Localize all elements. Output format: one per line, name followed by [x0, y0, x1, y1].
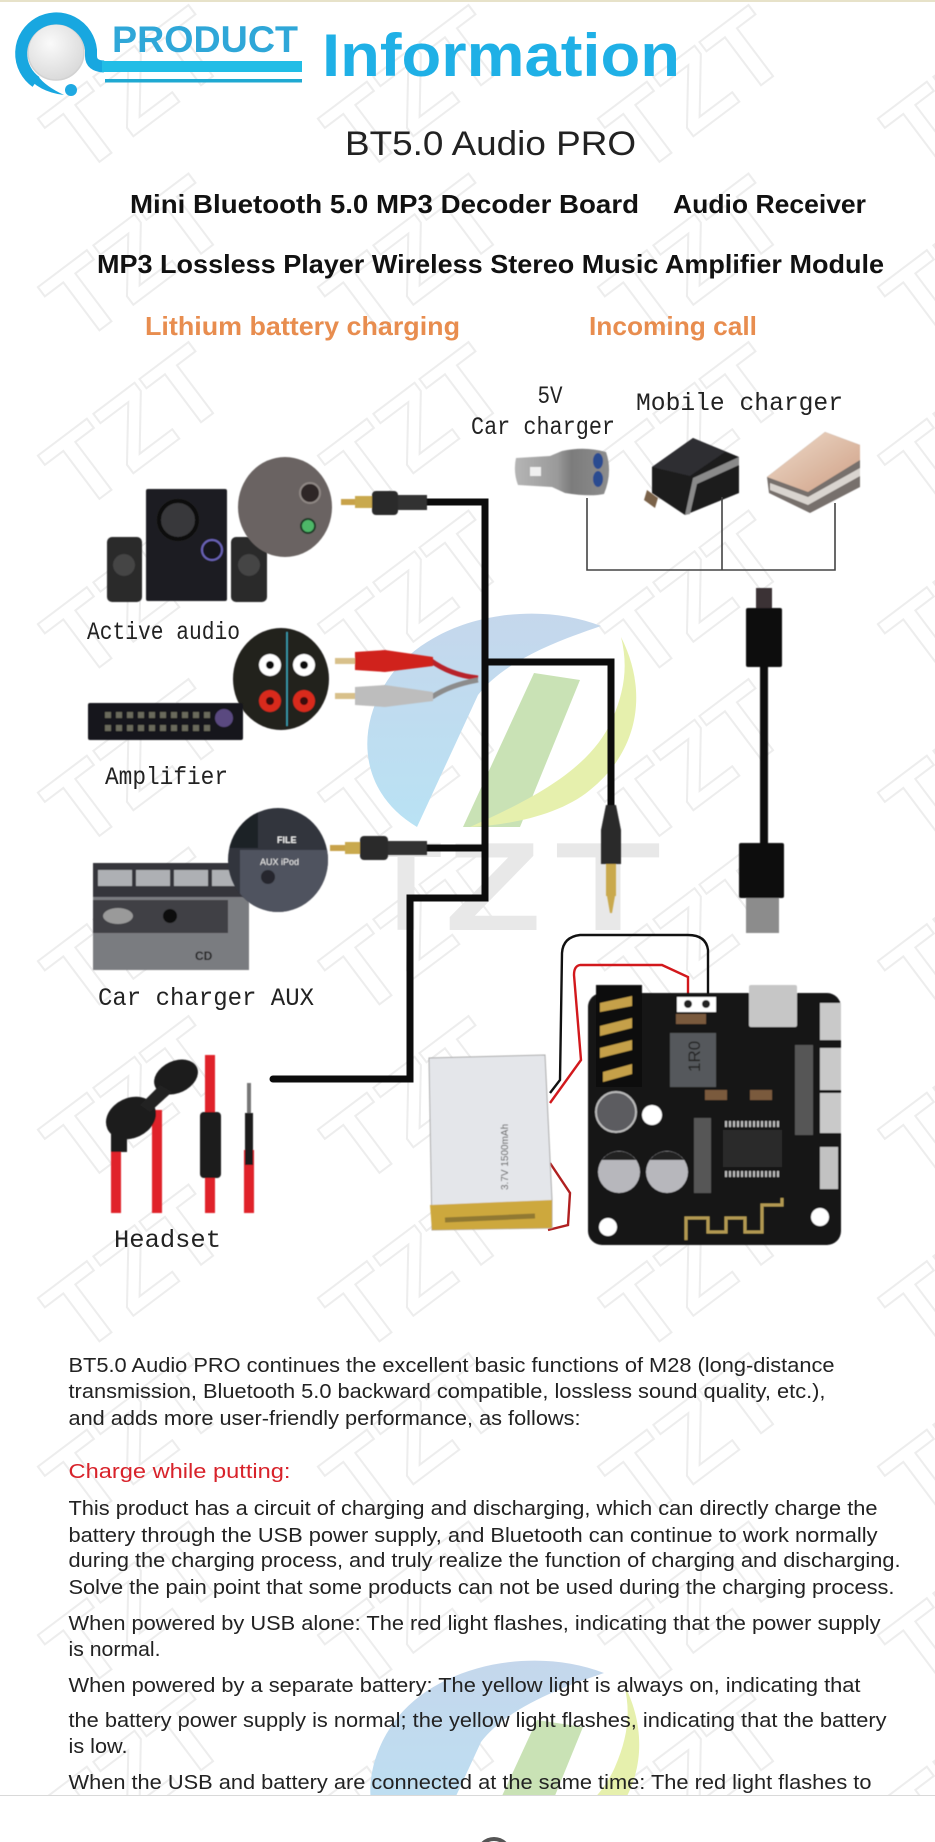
TZT watermark: Z [445, 816, 541, 957]
chip [723, 1130, 782, 1167]
label: amplifier: Amplifier [105, 763, 228, 792]
description paragraph: during the charging process, and truly realize the function of charging and discharging. [68, 1550, 900, 1572]
logo watermark [367, 614, 636, 827]
pads [677, 997, 716, 1012]
icon: car charger [515, 449, 609, 495]
audio jack [596, 985, 642, 1087]
icon: wall charger [644, 438, 739, 515]
description paragraph [68, 1498, 900, 1599]
battery power note: the battery power supply is normal; the yellow light flashes, indicating that the battery [68, 1710, 886, 1732]
connection diagram [87, 382, 860, 1255]
icon: car stereo [93, 863, 249, 970]
top strip [0, 0, 935, 2]
PRODUCT label: PRODUCT [112, 19, 298, 60]
icon: lithium battery [429, 1055, 552, 1230]
intro paragraph: transmission, Bluetooth 5.0 backward compatible, lossless sound quality, etc.), [68, 1381, 826, 1403]
header: product information [21, 18, 680, 96]
battery power note: is low. [68, 1736, 128, 1758]
feature labels [145, 311, 757, 341]
intro paragraph [68, 1355, 834, 1430]
charger connector lines [587, 497, 835, 570]
icon: power bank [767, 432, 860, 513]
icon: partial circle [478, 1839, 510, 1842]
side buttons [820, 1003, 841, 1040]
description paragraph: This product has a circuit of charging and discharging, which can directly charge the [68, 1498, 877, 1520]
holes [599, 1218, 617, 1236]
battery power note [68, 1675, 886, 1758]
USB power note: When powered by USB alone: The red light flashes, indicating that the power supply [68, 1613, 880, 1635]
intro paragraph: BT5.0 Audio PRO continues the excellent basic functions of M28 (long-distance [68, 1355, 834, 1377]
subtitle line 1: Mini Bluetooth 5.0 MP3 Decoder Board [130, 189, 639, 219]
battery wires [548, 935, 708, 1230]
icon: car stereo: CD [195, 949, 213, 963]
description paragraph: battery through the USB power supply, and Bluetooth can continue to work normally [68, 1525, 878, 1547]
icon: lithium battery: 3.7V 1500mAh [500, 1124, 511, 1190]
logo watermark, lower [370, 1661, 639, 1842]
plug: aux 2 [330, 836, 427, 860]
feature labels: Incoming call [589, 311, 757, 341]
capacitors [598, 1151, 640, 1193]
inset: AUX port: AUX iPod [260, 857, 299, 867]
circuit board [588, 985, 841, 1245]
feature labels: Lithium battery charging [145, 311, 460, 341]
icon: amplifier [88, 703, 243, 740]
Information label: Information [322, 22, 680, 89]
micro USB [749, 985, 797, 1027]
antenna [686, 1198, 782, 1240]
charger labels: 5V [538, 382, 562, 411]
intro paragraph: and adds more user-friendly performance, as follows: [68, 1408, 580, 1430]
TZT watermark [370, 816, 661, 957]
TZT watermark: T [370, 816, 442, 957]
plug: RCA pair and wires [335, 650, 478, 707]
subtitle line 2: MP3 Lossless Player Wireless Stereo Music Amplifier Module [97, 249, 884, 279]
plug: aux 1 [341, 491, 427, 515]
inset: audio port [238, 457, 332, 557]
circuit board: 1R0 [685, 1041, 704, 1072]
title: BT5.0 Audio PRO [345, 125, 636, 163]
icon: active speakers [107, 489, 267, 602]
inset: AUX port [228, 808, 330, 912]
USB cable [739, 588, 784, 933]
microphone [596, 1092, 636, 1132]
charger labels: Car charger [471, 413, 615, 442]
subtitle line 1 [130, 189, 866, 219]
inset: AUX port: FILE [277, 835, 296, 845]
inductor [670, 1033, 716, 1087]
USB power note: is normal. [68, 1639, 160, 1661]
icon: headset [99, 1053, 254, 1213]
battery power note: When powered by a separate battery: The yellow light is always on, indicating that [68, 1675, 861, 1697]
description paragraph: Solve the pain point that some products can not be used during the charging process. [68, 1577, 895, 1599]
label: car charger aux: Car charger AUX [98, 984, 314, 1013]
charger labels: Mobile charger [636, 389, 843, 418]
label: headset: Headset [114, 1226, 221, 1255]
plug: output jack [601, 805, 621, 913]
section heading: charge while putting: Charge while putting: [68, 1461, 290, 1483]
USB power note [68, 1613, 880, 1661]
charger labels [471, 382, 843, 442]
USB and battery note: When the USB and battery are connected at the same time: The red light flashes to [68, 1772, 872, 1794]
SMD strips [694, 1118, 711, 1193]
label: active audio: Active audio [87, 618, 240, 647]
subtitle line 1: Audio Receiver [673, 189, 866, 219]
TZT watermark: T [555, 816, 661, 957]
bottom bar [0, 1795, 935, 1842]
inset: RCA sockets [233, 628, 329, 730]
icon: ring logo [21, 18, 302, 96]
main audio cables [273, 502, 611, 1079]
